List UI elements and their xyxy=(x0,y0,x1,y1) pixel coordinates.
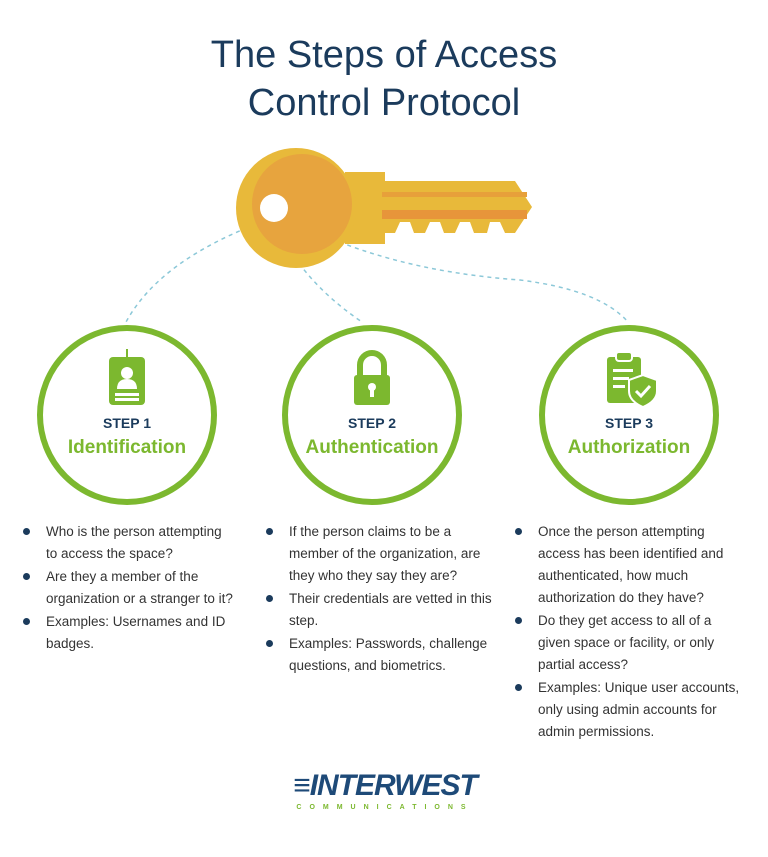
icon: padlock xyxy=(354,350,390,405)
list: authorization: Do they get access to all of a given space or facility, or only partial access? xyxy=(538,613,714,672)
title xyxy=(211,34,557,124)
icon: clipboard with shield xyxy=(607,353,656,406)
list: identification: Who is the person attempting to access the space? xyxy=(46,524,222,561)
dashed connectors xyxy=(126,215,628,322)
step 2 circle: STEP 2 xyxy=(348,415,396,431)
title: Control Protocol xyxy=(248,82,520,124)
step 3 circle xyxy=(539,325,719,505)
step 2 circle: Authentication xyxy=(306,437,438,458)
list: authentication: Their credentials are vetted in this step. xyxy=(289,591,492,628)
step 1 circle xyxy=(37,325,217,505)
list: authorization: Examples: Unique user accounts, only using admin accounts for admin permissions. xyxy=(538,680,739,739)
step 1 circle: STEP 1 xyxy=(103,415,151,431)
key xyxy=(236,148,532,268)
list: authorization: Once the person attempting access has been identified and authenticated, how much authorization do they have? xyxy=(538,524,723,605)
step 2 circle xyxy=(282,325,462,505)
list: authentication: If the person claims to be a member of the organization, are they who they say they are? xyxy=(289,524,480,583)
list: identification xyxy=(23,524,233,651)
list: authorization xyxy=(515,524,739,739)
step 3 circle: STEP 3 xyxy=(605,415,653,431)
step 3 circle: Authorization xyxy=(568,437,690,458)
logo: ≡INTERWEST xyxy=(293,769,477,802)
icon: ID badge xyxy=(109,349,145,405)
list: identification: Examples: Usernames and ID badges. xyxy=(46,614,225,651)
list: authentication xyxy=(266,524,492,673)
title: The Steps of Access xyxy=(211,34,557,76)
step 1 circle: Identification xyxy=(68,437,186,458)
logo: COMMUNICATIONS xyxy=(296,804,474,811)
list: identification: Are they a member of the organization or a stranger to it? xyxy=(46,569,233,606)
list: authentication: Examples: Passwords, challenge questions, and biometrics. xyxy=(289,636,487,673)
